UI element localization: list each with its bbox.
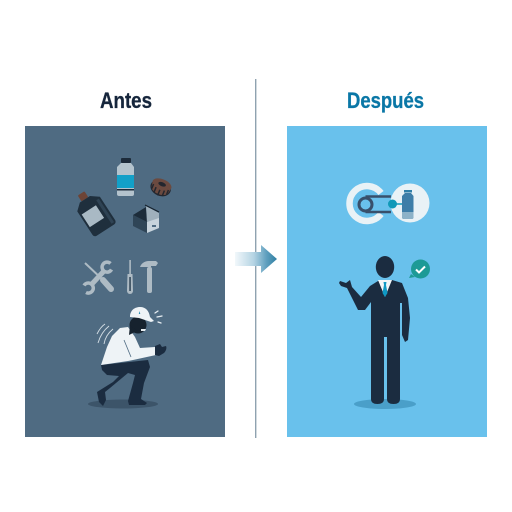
figure: stressed worker (88, 307, 166, 408)
head (130, 316, 146, 334)
head (376, 256, 394, 278)
icon: brown gear (148, 176, 174, 199)
shirt (101, 327, 156, 365)
icon: bottle with blue label (117, 158, 134, 196)
hard hat (130, 307, 154, 322)
figure: confident businessman (339, 256, 416, 409)
trousers (97, 360, 150, 406)
icon: dark bottle (70, 186, 117, 237)
motion arcs (97, 324, 113, 344)
icon: screwdriver (127, 260, 133, 294)
tie (382, 282, 388, 297)
heading: Antes: Antes (100, 88, 152, 113)
icon: wrench and screwdriver crossed (84, 262, 112, 293)
suit (339, 280, 410, 404)
glove (155, 344, 166, 356)
heading: Después: Después (347, 88, 424, 113)
icon: hammer (140, 261, 158, 293)
icon: linked chain and bottle (350, 184, 430, 222)
sweat marks (155, 311, 162, 323)
floor shadow (354, 399, 416, 409)
floor shadow (88, 400, 158, 408)
panel: después (287, 126, 487, 437)
icon: open box (133, 205, 159, 233)
shirt (378, 280, 392, 297)
arrow (235, 245, 277, 273)
icon: check badge (409, 260, 430, 278)
arm line (124, 340, 131, 357)
panel: antes (25, 126, 225, 437)
